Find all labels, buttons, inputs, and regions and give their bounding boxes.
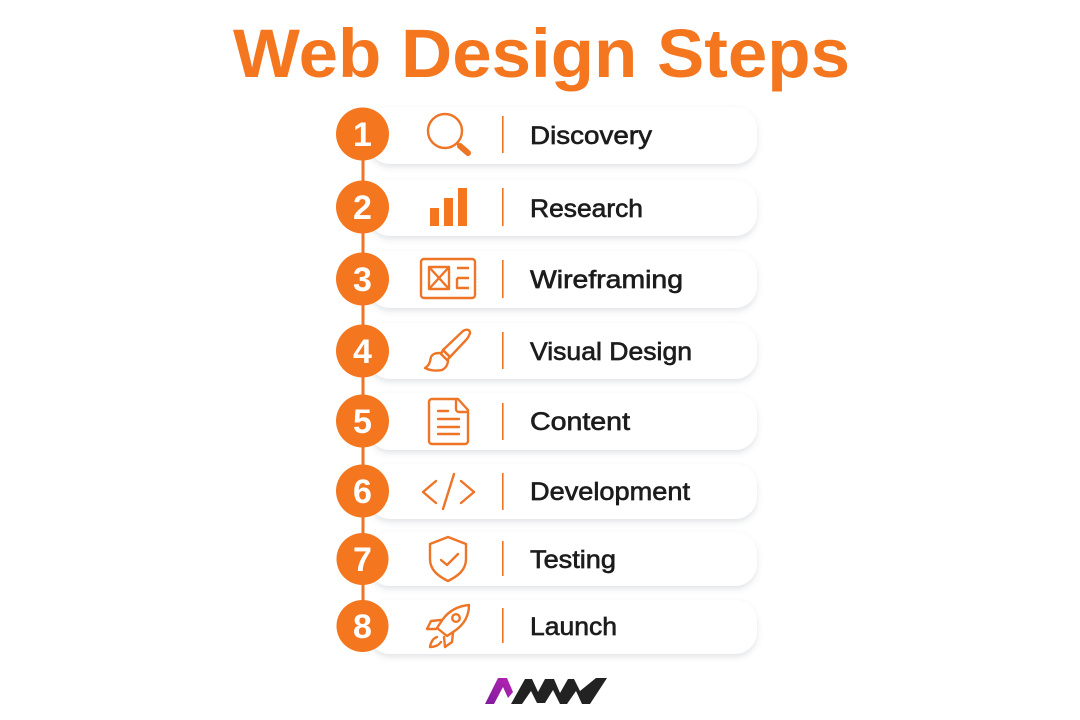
step 4: Visual Design <box>336 323 757 379</box>
label: Development: Development <box>530 478 690 506</box>
card 6 <box>368 464 757 519</box>
label: Research: Research <box>530 195 643 223</box>
icon: wireframe <box>421 259 475 298</box>
step 7: Testing <box>336 532 757 586</box>
number badge 5 <box>336 394 389 448</box>
label: Discovery: Discovery <box>530 122 653 150</box>
title: Web Design Steps <box>233 15 850 92</box>
number badge 2 <box>336 180 389 234</box>
step 8: Launch <box>336 600 757 654</box>
card 4 <box>368 323 757 379</box>
step 6: Development <box>336 464 757 519</box>
logo <box>485 678 607 704</box>
number badge 4: 4 <box>353 333 372 371</box>
card 7 <box>368 532 757 586</box>
number badge 1: 1 <box>353 116 372 154</box>
number badge 6: 6 <box>353 473 372 511</box>
number badge 5: 5 <box>353 403 372 441</box>
card 3 <box>368 251 757 308</box>
number badge 7: 7 <box>353 541 372 579</box>
dividers <box>502 116 504 643</box>
icon: bar chart <box>430 188 467 226</box>
label: Visual Design: Visual Design <box>530 338 692 366</box>
icon: magnifying glass <box>428 114 468 153</box>
logo purple peak <box>485 678 513 704</box>
card 8 <box>368 600 757 654</box>
card 2 <box>368 180 757 236</box>
icon: paint brush <box>425 330 470 371</box>
number badge 3: 3 <box>353 261 372 299</box>
label: Launch: Launch <box>530 613 617 641</box>
number badge 7 <box>336 533 388 585</box>
step 5: Content <box>336 393 757 450</box>
number badge 4 <box>336 324 389 378</box>
icon: rocket <box>427 605 469 647</box>
card 1 <box>368 107 757 164</box>
label: Testing: Testing <box>530 546 616 574</box>
icon: code brackets <box>423 474 474 509</box>
icon: shield with check <box>430 537 466 581</box>
number badge 8 <box>336 600 388 652</box>
step 3: Wireframing <box>336 251 757 308</box>
label: Content: Content <box>530 408 630 436</box>
step 2: Research <box>336 180 757 236</box>
logo black waves <box>511 678 607 704</box>
number badge 1 <box>336 108 389 160</box>
number badge 8: 8 <box>353 608 372 646</box>
icon: document <box>429 399 468 444</box>
card 5 <box>368 393 757 450</box>
step 1: Discovery <box>336 107 757 164</box>
number badge 2: 2 <box>353 189 372 227</box>
number badge 3 <box>336 252 389 306</box>
label: Wireframing: Wireframing <box>530 266 683 294</box>
number badge 6 <box>336 464 389 518</box>
timeline connector <box>362 134 364 626</box>
